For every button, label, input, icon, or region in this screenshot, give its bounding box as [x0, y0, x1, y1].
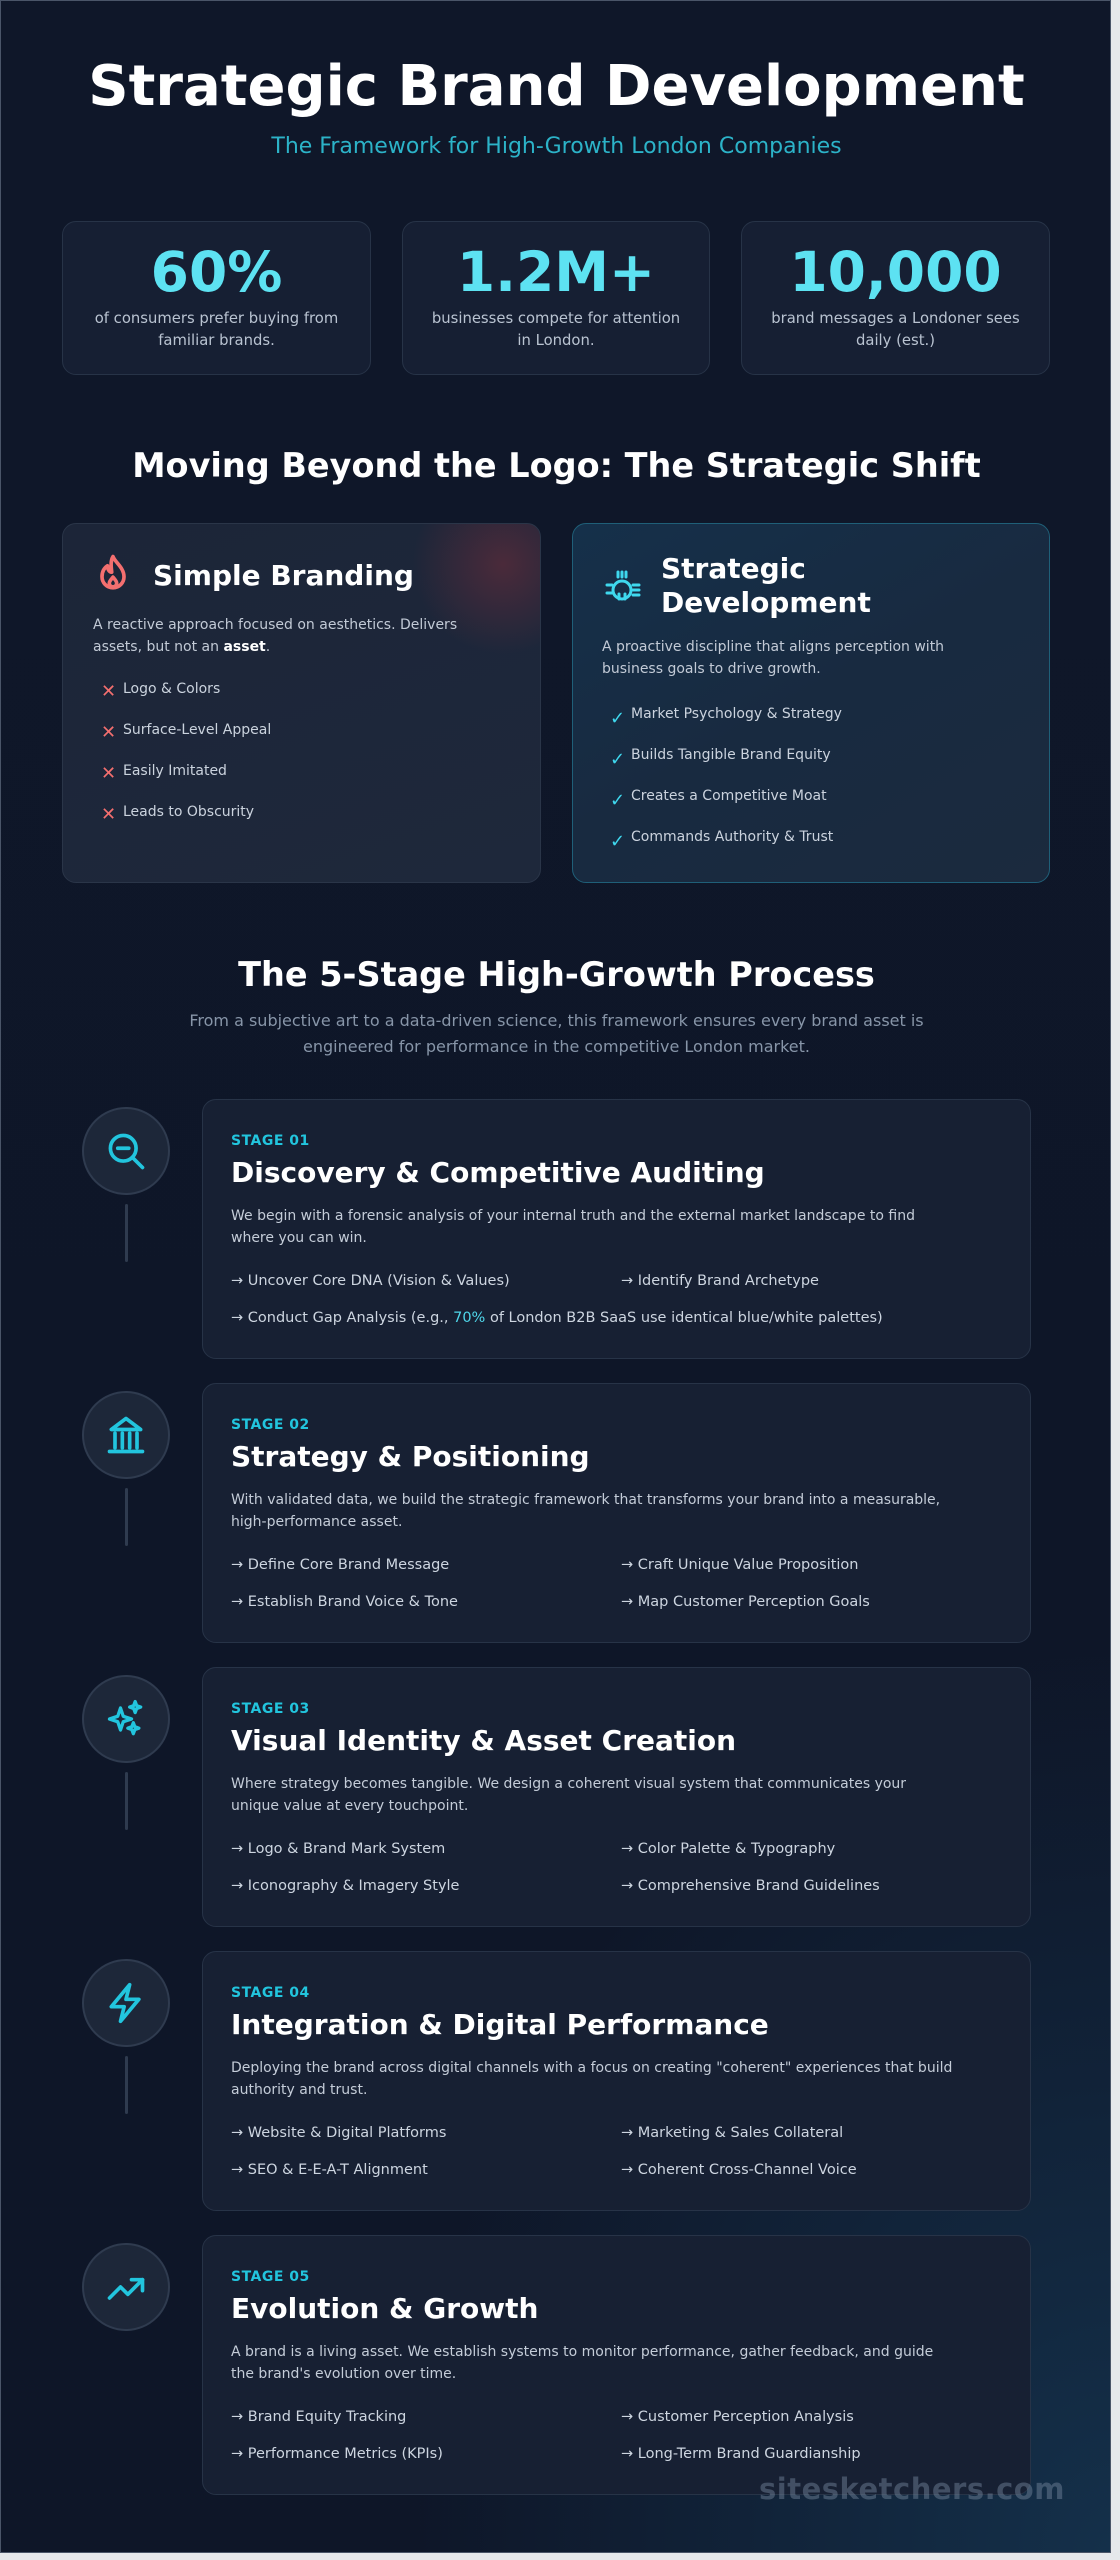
stage description: unique value at every touchpoint. — [231, 1798, 468, 1814]
stage description — [231, 2344, 933, 2382]
list: strengths: Builds Tangible Brand Equity — [631, 747, 831, 763]
icon: stage 5 trending up — [82, 2243, 170, 2331]
stage bullets: → Customer Perception Analysis — [621, 2409, 854, 2425]
stage description: where you can win. — [231, 1230, 367, 1246]
panel heading — [661, 552, 871, 619]
list: strengths: Creates a Competitive Moat — [631, 788, 827, 804]
section subtitle — [189, 1011, 924, 1056]
stage bullets — [231, 2409, 861, 2462]
stage label: STAGE 05 — [231, 2269, 310, 2285]
stage bullets: → Coherent Cross-Channel Voice — [621, 2162, 857, 2178]
stage bullets: → Performance Metrics (KPIs) — [231, 2446, 443, 2462]
stat caption: daily (est.) — [856, 332, 935, 349]
stage bullets: → Craft Unique Value Proposition — [621, 1557, 858, 1573]
stage bullets: → Uncover Core DNA (Vision & Values) — [231, 1273, 510, 1289]
stage bullets: → Website & Digital Platforms — [231, 2125, 446, 2141]
stat caption: businesses compete for attention — [432, 310, 680, 327]
stage description — [231, 1492, 940, 1530]
list: weaknesses: Logo & Colors — [123, 681, 220, 697]
stage description: high-performance asset. — [231, 1514, 402, 1530]
icon: stage 4 lightning — [82, 1959, 170, 2047]
list: strengths — [610, 706, 842, 852]
panel description: A reactive approach focused on aesthetics. Delivers — [93, 617, 457, 633]
stage label: STAGE 01 — [231, 1133, 310, 1149]
stat number: 1.2M+ — [457, 240, 655, 304]
list: weaknesses: Surface-Level Appeal — [123, 722, 271, 738]
stat card: 60% — [62, 221, 371, 375]
panel: simple branding — [62, 523, 541, 883]
section subtitle: From a subjective art to a data-driven science, this framework ensures every brand asset is — [189, 1011, 924, 1030]
icon: flame — [100, 554, 126, 590]
stage description: the brand's evolution over time. — [231, 2366, 456, 2382]
stage bullets: → Comprehensive Brand Guidelines — [621, 1878, 880, 1894]
icon: stage 2 landmark — [82, 1391, 170, 1479]
stat caption — [432, 310, 680, 349]
title: Strategic Brand Development — [88, 54, 1025, 119]
stage title: Integration & Digital Performance — [231, 2008, 769, 2041]
stage label: STAGE 04 — [231, 1985, 310, 2001]
icon: stage 3 sparkles — [82, 1675, 170, 1763]
stage bullets — [231, 1273, 883, 1326]
list: weaknesses: ✕ — [101, 804, 116, 825]
stage bullets: → SEO & E-E-A-T Alignment — [231, 2162, 428, 2178]
stage bullets: → Long-Term Brand Guardianship — [621, 2446, 861, 2462]
stage bullets: → Map Customer Perception Goals — [621, 1594, 870, 1610]
panel description — [93, 617, 457, 655]
stage bullets — [231, 2125, 857, 2178]
stage bullets — [231, 1841, 880, 1894]
stat caption: in London. — [517, 332, 595, 349]
list: strengths: ✓ — [610, 790, 625, 811]
list: weaknesses: ✕ — [101, 763, 116, 784]
stage label: STAGE 02 — [231, 1417, 310, 1433]
section heading: 5-stage process: The 5-Stage High-Growth Process — [238, 955, 875, 994]
list: strengths: Commands Authority & Trust — [631, 829, 833, 845]
list: strengths: ✓ — [610, 749, 625, 770]
stat caption: brand messages a Londoner sees — [771, 310, 1020, 327]
subtitle: The Framework for High-Growth London Companies — [271, 134, 842, 159]
stat number: 10,000 — [789, 240, 1002, 304]
icon: stage 1 magnifier — [82, 1107, 170, 1195]
list: weaknesses: ✕ — [101, 722, 116, 743]
stage title: Strategy & Positioning — [231, 1440, 590, 1473]
panel heading: Development — [661, 586, 871, 619]
stage description: A brand is a living asset. We establish systems to monitor performance, gather feedback, and guide — [231, 2344, 933, 2360]
stage bullets: → Identify Brand Archetype — [621, 1273, 819, 1289]
stage 1 card — [202, 1099, 1031, 1359]
list: strengths: ✓ — [610, 831, 625, 852]
list: strengths: ✓ — [610, 708, 625, 729]
stage description: Deploying the brand across digital channels with a focus on creating "coherent" experiences that build — [231, 2060, 952, 2076]
stat caption — [95, 310, 338, 349]
stage label: STAGE 03 — [231, 1701, 310, 1717]
stage bullets: → Conduct Gap Analysis (e.g., 70% of London B2B SaaS use identical blue/white palettes) — [231, 1310, 883, 1326]
stat card: 10,000 — [741, 221, 1050, 375]
stage bullets: → Color Palette & Typography — [621, 1841, 835, 1857]
stage description: With validated data, we build the strategic framework that transforms your brand into a measurable, — [231, 1492, 940, 1508]
list: weaknesses: Easily Imitated — [123, 763, 227, 779]
stage description: Where strategy becomes tangible. We design a coherent visual system that communicates your — [231, 1776, 906, 1792]
list: weaknesses: ✕ — [101, 681, 116, 702]
stat caption: familiar brands. — [158, 332, 275, 349]
stage description — [231, 2060, 952, 2098]
section subtitle: engineered for performance in the competitive London market. — [303, 1037, 810, 1056]
list: weaknesses: Leads to Obscurity — [123, 804, 254, 820]
panel: strategic development — [572, 523, 1050, 883]
stage bullets: → Marketing & Sales Collateral — [621, 2125, 843, 2141]
section heading: strategic shift: Moving Beyond the Logo: The Strategic Shift — [132, 446, 981, 485]
stat number: 60% — [151, 240, 282, 304]
stage description: authority and trust. — [231, 2082, 367, 2098]
stage description: We begin with a forensic analysis of your internal truth and the external market landscape to find — [231, 1208, 915, 1224]
stage title: Evolution & Growth — [231, 2292, 538, 2325]
stage 3 card — [202, 1667, 1031, 1927]
stage bullets: → Establish Brand Voice & Tone — [231, 1594, 458, 1610]
list: weaknesses — [101, 681, 271, 825]
stat caption: of consumers prefer buying from — [95, 310, 338, 327]
stage title: Discovery & Competitive Auditing — [231, 1156, 765, 1189]
panel description: assets, but not an asset. — [93, 639, 270, 655]
icon: idea chip — [606, 570, 640, 600]
stage title: Visual Identity & Asset Creation — [231, 1724, 736, 1757]
stage bullets: → Define Core Brand Message — [231, 1557, 449, 1573]
stat card: 1.2M+ — [402, 221, 710, 375]
stage bullets: → Logo & Brand Mark System — [231, 1841, 445, 1857]
panel description: business goals to drive growth. — [602, 661, 821, 677]
panel description — [602, 639, 944, 677]
stage description — [231, 1208, 915, 1246]
stage 2 card — [202, 1383, 1031, 1643]
stage description — [231, 1776, 906, 1814]
list: strengths: Market Psychology & Strategy — [631, 706, 842, 722]
stat caption — [771, 310, 1020, 349]
panel description: A proactive discipline that aligns perception with — [602, 639, 944, 655]
panel heading: Simple Branding — [153, 559, 414, 592]
stage 5 card — [202, 2235, 1031, 2495]
panel heading: Strategic — [661, 552, 806, 585]
stage bullets: → Iconography & Imagery Style — [231, 1878, 459, 1894]
stage 4 card — [202, 1951, 1031, 2211]
stage bullets: → Brand Equity Tracking — [231, 2409, 406, 2425]
stage bullets — [231, 1557, 870, 1610]
watermark: sitesketchers.com — [759, 2472, 1065, 2506]
